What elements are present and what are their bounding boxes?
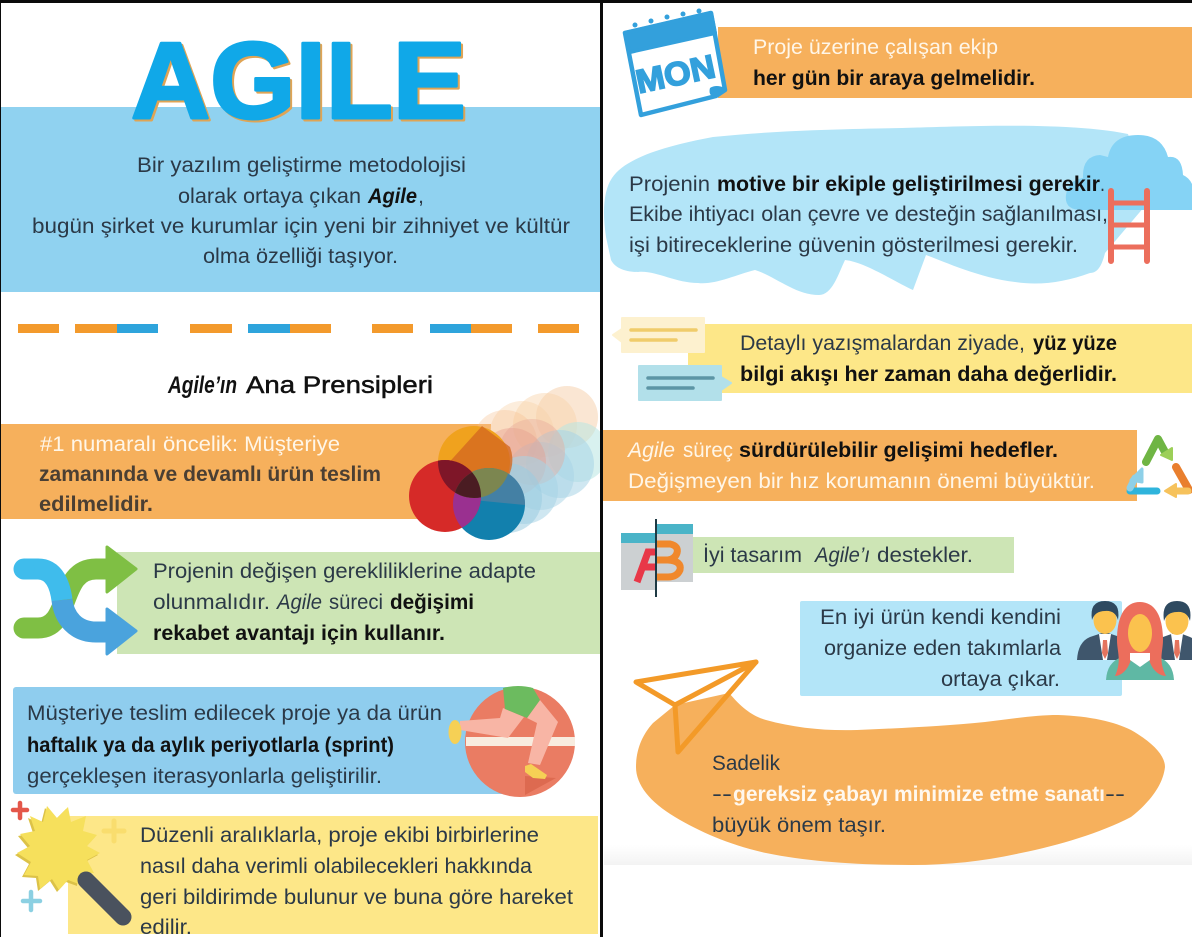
adapt text (153, 560, 536, 645)
icon: calendar (625, 8, 725, 115)
title: AGILE (133, 22, 468, 144)
panel: self organizing teams (800, 601, 1192, 696)
face to face text: bilgi akışı her zaman daha değerlidir. (740, 363, 1117, 386)
daily meeting text: her gün bir araya gelmelidir. (753, 67, 1035, 90)
icon: magic wand (13, 803, 123, 917)
adapt text: Agile (275, 591, 322, 614)
face to face text (740, 332, 1117, 386)
adapt text: rekabet avantajı için kullanır. (153, 622, 445, 645)
panel: adapt to change (14, 547, 600, 654)
daily meeting text: Proje üzerine çalışan ekip (753, 36, 998, 59)
sustainable text: Değişmeyen bir hız korumanın önemi büyüktür. (628, 470, 1095, 493)
panel: face to face (613, 318, 1192, 400)
icon: paper plane (636, 662, 756, 752)
sustainable text: süreç (683, 439, 733, 462)
simplicity text: Sadelik (712, 752, 780, 775)
sprints text: Müşteriye teslim edilecek proje ya da ürün (27, 702, 442, 725)
intro text (32, 154, 570, 268)
intro text: olma özelliği taşıyor. (203, 245, 398, 268)
motivated team text: motive bir ekiple geliştirilmesi gerekir (717, 173, 1100, 196)
dashed divider (18, 324, 579, 333)
priority text: zamanında ve devamlı ürün teslim (39, 463, 381, 486)
teams text: En iyi ürün kendi kendini (820, 606, 1061, 629)
intro text: Agile (367, 185, 417, 208)
priority text: edilmelidir. (39, 493, 153, 516)
adapt text: olunmalıdır. (153, 591, 270, 614)
panel: customer priority (1, 386, 608, 540)
daily meeting text (753, 36, 1035, 90)
intro text: Bir yazılım geliştirme metodolojisi (137, 154, 466, 177)
icon: calendar: MON (632, 47, 718, 100)
panel: sprints (13, 686, 575, 797)
icon: shuffle arrows (14, 547, 136, 654)
teams text: ortaya çıkar. (941, 668, 1060, 691)
simplicity text (712, 752, 1125, 837)
good design text: İyi tasarım (703, 544, 802, 567)
adapt text: süreci (329, 591, 383, 614)
icon: cloud (1066, 135, 1192, 210)
motivated team text: Ekibe ihtiyacı olan çevre ve desteğin sağlanılması, (629, 203, 1108, 226)
motivated team text: Projenin (629, 173, 710, 196)
icon: runner (448, 686, 575, 797)
simplicity text: gereksiz çabayı minimize etme sanatı (733, 783, 1105, 806)
teams text (820, 606, 1061, 691)
feedback text (140, 824, 573, 937)
feedback text: nasıl daha verimli olabilecekleri hakkında (140, 855, 532, 878)
priority text: #1 numaralı öncelik: Müşteriye (40, 433, 340, 456)
face to face text: yüz yüze (1033, 332, 1117, 355)
icon: blue speech bubble (639, 366, 731, 400)
panel: good design (621, 519, 1014, 597)
feedback text: geri bildirimde bulunur ve buna göre hareket (140, 886, 573, 909)
icon: cream speech bubble (613, 318, 704, 352)
sprints text: haftalık ya da aylık periyotlarla (sprint) (27, 734, 394, 757)
adapt text: Projenin değişen gerekliliklerine adapte (153, 560, 536, 583)
heading: principles: Agile’ın (167, 372, 237, 399)
sustainable text (626, 439, 1095, 493)
motivated team text (629, 173, 1108, 257)
simplicity text: -- (1105, 783, 1125, 806)
simplicity text: büyük önem taşır. (712, 814, 886, 837)
intro panel (1, 107, 600, 292)
good design text: destekler. (877, 544, 973, 567)
face to face text: Detaylı yazışmalardan ziyade, (740, 332, 1025, 355)
good design text (703, 544, 973, 567)
icon: recycle arrows (1130, 439, 1189, 497)
intro text: bugün şirket ve kurumlar için yeni bir zihniyet ve kültür (32, 215, 570, 238)
priority text (39, 433, 381, 516)
teams text: organize eden takımlarla (824, 637, 1061, 660)
icon: people (1077, 601, 1192, 680)
sustainable text: sürdürülebilir gelişimi hedefler. (739, 439, 1058, 462)
motivated team text: işi bitireceklerine güvenin gösterilmesi gerekir. (629, 234, 1078, 257)
panel: sustainable development (603, 430, 1189, 501)
icon: overlapping circles (409, 386, 608, 540)
sprints text: gerçekleşen iterasyonlarla geliştirilir. (27, 765, 382, 788)
panel: feedback (13, 803, 598, 937)
heading: principles (167, 372, 433, 399)
title: AGILE (131, 20, 466, 142)
panel: motivated team (604, 126, 1192, 295)
simplicity text: -- (712, 783, 732, 806)
intro text: , (418, 185, 424, 208)
feedback text: Düzenli aralıklarla, proje ekibi birbirlerine (140, 824, 539, 847)
intro text: olarak ortaya çıkan (178, 185, 361, 208)
adapt text: değişimi (390, 591, 474, 614)
icon: ladder (1111, 191, 1147, 261)
motivated team text: . (1100, 173, 1105, 196)
panel: daily meeting (625, 8, 1192, 115)
sprints text (27, 702, 442, 788)
heading: principles: Ana Prensipleri (246, 372, 433, 399)
sustainable text: Agile (626, 439, 675, 462)
good design text: Agile’ı (813, 544, 870, 567)
icon: A/B test (621, 519, 693, 597)
icon: plus yellow (104, 821, 124, 841)
panel: simplicity (636, 662, 1165, 865)
